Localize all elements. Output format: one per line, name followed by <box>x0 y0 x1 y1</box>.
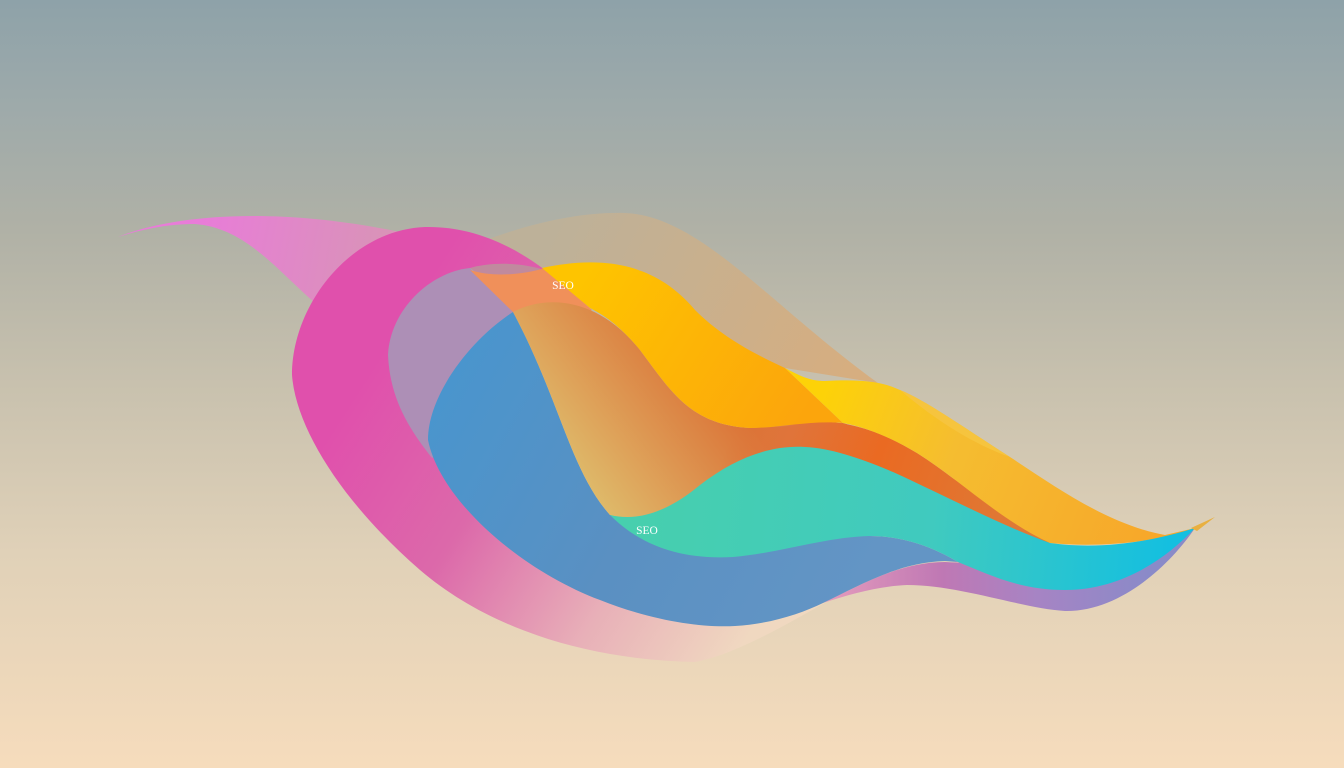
ribbon: purple tail band <box>823 528 1195 611</box>
ribbon: tan to orange centre <box>513 302 1050 543</box>
ribbon: teal wave <box>610 447 1195 590</box>
ribbon: red-orange stripe <box>720 421 1050 543</box>
ribbon: gold tip <box>1191 517 1215 531</box>
ribbon: pink wing <box>118 216 400 303</box>
ribbon: tan back fold <box>480 213 878 383</box>
ribbon: lighter yellow crease <box>900 390 1010 457</box>
label: lower SEO: SEO <box>636 525 658 537</box>
ribbon: magenta crescent <box>292 227 830 662</box>
ribbon: blue body <box>428 312 958 626</box>
ribbon: gold upper fold <box>542 262 843 428</box>
ribbon: orange upper strip <box>470 268 592 330</box>
ribbon: yellow right fold <box>785 368 1195 545</box>
label: upper SEO: SEO <box>552 280 574 292</box>
ribbon: translucent overlap strip <box>470 264 545 277</box>
ribbon: grey-purple lens <box>388 268 520 458</box>
